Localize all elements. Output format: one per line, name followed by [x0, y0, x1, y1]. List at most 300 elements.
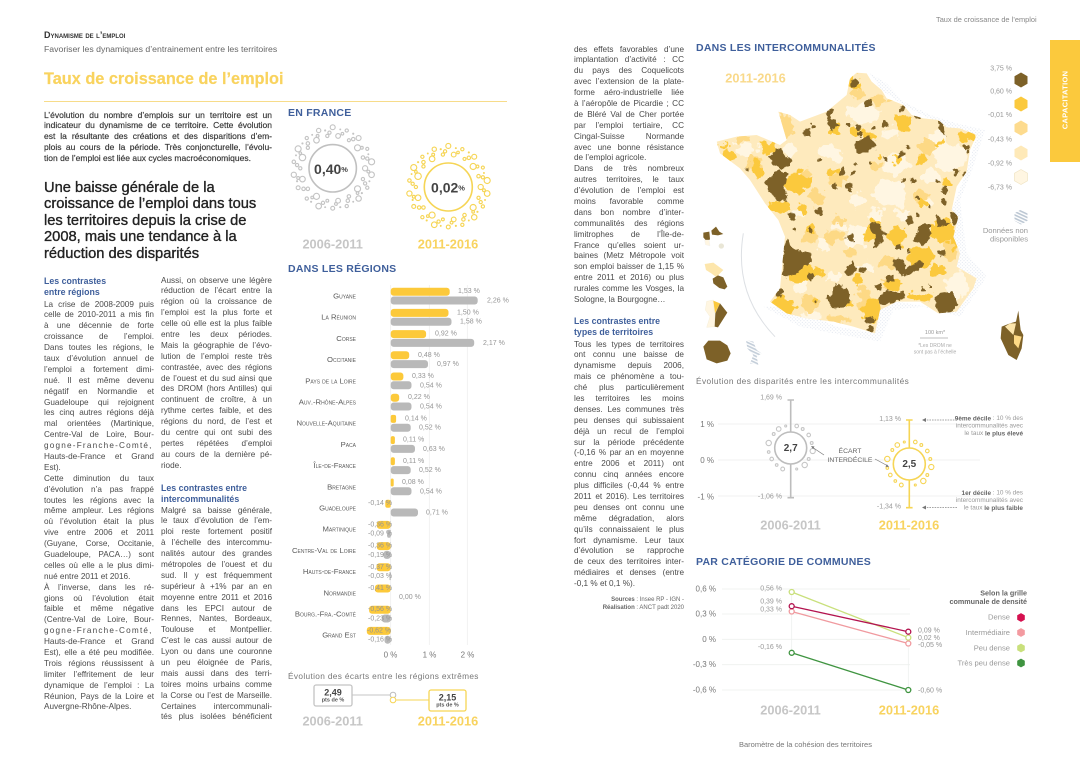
map scale: 100 km* — [925, 330, 946, 336]
text column 2 continued: dans les EPCI autour de — [161, 604, 272, 613]
text column 3: dans bon nombre d’inter- — [574, 208, 684, 217]
text column 2 — [161, 276, 272, 470]
line chart: communes: 2006-2011 — [760, 702, 821, 718]
text column 2 continued: toires moins urbains comme — [161, 680, 272, 689]
map scale — [914, 330, 956, 356]
region names: Pays de la Loire — [305, 376, 357, 385]
value labels: 1,58 % — [460, 318, 482, 326]
text column 3: avec une bonne résistance — [574, 143, 684, 152]
text column 2 continued: ploi reste fortement positif — [161, 527, 272, 536]
bars 2011-2016 — [367, 288, 450, 635]
Mayotte — [746, 340, 762, 365]
text column 1: (Centre-Val de Loire, Bour- — [44, 615, 154, 624]
value labels: -0,56 % — [368, 606, 392, 613]
axis labels: 0 % — [384, 650, 397, 660]
text column 2 continued: un peu éloignée de Paris, — [161, 658, 272, 667]
box 2,15: 2,15 — [439, 692, 456, 702]
text column 3: forme aéro-industrielle liée — [574, 88, 684, 97]
line chart: communes: 0,02 % — [918, 635, 940, 642]
text column 3: de Bléré Val de Cher portée — [574, 110, 684, 119]
value labels: 0,11 % — [403, 458, 424, 465]
inset arc — [741, 233, 775, 337]
text column 3 continued — [574, 340, 684, 588]
text column 2: du centre qui ont subi des — [161, 428, 272, 437]
text column 2: continuent de croître, à un — [161, 395, 272, 404]
text column 2 continued: sud. Il y est fréquemment — [161, 571, 272, 580]
chart: disparités: 2011-2016 — [879, 518, 939, 532]
map scale: *Les DROM ne — [918, 343, 952, 349]
value labels: 0,11 % — [403, 437, 424, 444]
section subtitle: Favoriser les dynamiques d’entrainement entre les territoires — [44, 44, 277, 54]
value labels: -0,09 % — [368, 530, 392, 538]
Guadeloupe — [703, 227, 724, 249]
value labels: -0,19 % — [368, 552, 392, 559]
value labels: 0,97 % — [437, 361, 459, 368]
text column 2: riode. — [161, 461, 181, 470]
palest territories — [737, 103, 968, 321]
text column 1: Cette diminution du taux — [44, 474, 154, 483]
map legend: -6,73 % — [988, 184, 1012, 192]
text column 3: autres territoires, le taux — [574, 175, 684, 184]
interdecile 2011-2016: -1,34 % — [877, 504, 901, 510]
text column 1: celles où elle a le plus dimi- — [44, 561, 154, 570]
intro text: plois au cours de la période. Très conjoncturelle, l’évolu- — [44, 142, 272, 152]
map scale: sont pas à l’échelle — [914, 350, 956, 356]
text column 2: rythme certes faible, et des — [161, 406, 272, 415]
region names: Corse — [336, 334, 357, 343]
text column 1: La crise de 2008-2009 puis — [44, 300, 154, 308]
line chart: communes: -0,16 % — [758, 644, 782, 651]
text column 2: contrastée, avec des régions — [161, 363, 272, 372]
text column 1: Réunion, Pays de la Loire et — [44, 692, 154, 701]
text column 3: implantation d’activité : CC — [574, 55, 684, 64]
gap chart: régions extrêmes: 2011-2016 — [418, 714, 478, 728]
region names: Hauts-de-France — [303, 567, 357, 576]
text column 1: Dans toutes les régions, le — [44, 343, 154, 352]
axis labels: 1 % — [423, 650, 436, 660]
map legend: -0,92 % — [988, 160, 1012, 168]
value labels: -0,41 % — [368, 585, 392, 592]
line chart: communes: -0,05 % — [918, 642, 942, 649]
text column 2 continued: la Corse ou l’est de Marseille. — [161, 691, 272, 700]
9e décile note: le taux le plus élevé — [964, 430, 1023, 437]
region names — [292, 292, 357, 640]
text column 1: Est), elle a été peu modifiée. — [44, 648, 154, 657]
text column 2 continued: tés plus isolées bénéficient — [161, 712, 272, 721]
line chart: communes: 0,3 % — [696, 610, 716, 618]
text column 3 continued: (-0,16 % par an en moyenne — [574, 448, 684, 457]
text column 1: où l’évolution était la plus — [44, 517, 154, 526]
text column 2 continued: supérieur à +1% par an en — [161, 582, 272, 591]
value labels: -0,03 % — [368, 573, 392, 580]
text column 1: Centre-Val de Loire, Bour- — [44, 430, 154, 439]
text column 1: d’évolution n’a pas frappé — [44, 485, 154, 494]
text column 3 continued: de ceux des territoires inter- — [574, 557, 684, 566]
value labels: -0,37 % — [368, 564, 392, 571]
line chart: communes: 0 % — [702, 635, 716, 644]
value labels: -0,62 % — [367, 627, 391, 634]
text column 1: croissance de l’emploi. — [44, 332, 154, 341]
map period label: 2011-2016 — [725, 70, 786, 86]
box 2,49 — [314, 685, 352, 706]
text column 2 continued: Certaines intercommunali- — [161, 702, 272, 711]
value labels: 1,53 % — [458, 288, 480, 295]
subheading: contrastes entre régions: entre régions — [44, 287, 100, 297]
main heading: croissance de l’emploi dans tous — [44, 196, 256, 212]
map: France — [703, 70, 1023, 365]
text column 1: Est). — [44, 463, 61, 472]
text column 2 continued: Malgré sa baisse générale, — [161, 506, 272, 514]
interdecile 2006-2011 — [758, 394, 815, 500]
value labels: 0,48 % — [418, 352, 440, 359]
text column 3 continued: ché plus particulièrement — [574, 383, 684, 392]
text column 1: Guadeloupe qui rejoignent — [44, 398, 154, 407]
text column 1: nué entre 2011 et 2016. — [44, 572, 130, 581]
text column 3 continued: peu denses qui subissaient — [574, 416, 684, 425]
text column 3 continued: Tous les types de territoires — [574, 340, 684, 348]
value labels: 0,52 % — [419, 467, 441, 474]
value labels: 0,71 % — [426, 510, 448, 516]
value labels: 2,17 % — [483, 340, 505, 347]
map legend: disponibles — [990, 234, 1028, 244]
text column 3 continued: fort dynamisme. Leur taux — [574, 536, 684, 545]
map legend: 3,75 % — [990, 66, 1012, 72]
value labels: 0,22 % — [408, 394, 430, 401]
text column 3 continued: déjà un recul de l’emploi — [574, 427, 684, 436]
text column 2 continued: nalités autour des grandes — [161, 549, 272, 558]
legend: communes: Peu dense — [974, 644, 1010, 652]
subheading: contrastes entre types de territoires: types de territoires — [574, 327, 653, 337]
text column 2 continued — [161, 506, 272, 721]
value labels: -0,36 % — [368, 543, 392, 550]
Corse — [1001, 311, 1023, 360]
écart interdécile callout — [811, 446, 889, 467]
value labels: 1,50 % — [457, 309, 479, 316]
text column 2: celle où elle est la plus faible — [161, 319, 272, 328]
text column 1: les cinq autres régions déjà — [44, 408, 154, 417]
metropolitan territories — [710, 70, 983, 337]
text column 2: au cours de la dernière pé- — [161, 450, 272, 459]
text column 3 continued: plus difficiles (-0,44 % entre — [574, 481, 684, 490]
interdecile 2011-2016 — [877, 416, 934, 510]
gap chart title: Évolution des écarts entre les régions extrêmes — [288, 671, 479, 681]
Martinique — [705, 263, 727, 289]
text column 3 — [574, 44, 684, 304]
text column 2: l’emploi est la plus forte et — [161, 308, 272, 317]
écart interdécile callout: INTERDÉCILE — [828, 455, 873, 464]
chart: disparités: -1 % — [698, 492, 714, 502]
value labels: -0,14 % — [368, 500, 392, 507]
text column 3 continued: denses. Les communes très — [574, 405, 684, 414]
region names: Auv.-Rhône-Alpes — [299, 398, 357, 406]
intro text: est la résultante des créations et des disparitions d’em- — [44, 131, 272, 141]
text column 3 continued: les territoires les moins — [574, 394, 684, 403]
text column 3: du pays des Coquelicots — [574, 66, 684, 75]
bar chart: régions — [292, 285, 509, 660]
text column 1: dynamique de l’emploi : La — [44, 681, 154, 690]
main heading: réduction des disparités — [44, 246, 199, 262]
text column 3 continued: 2011 et 2016). Les territoires — [574, 492, 684, 501]
text column 3: Sologne, la Bourgogne… — [574, 295, 666, 304]
heading: par catégorie de communes: PAR CATÉGORIE DE COMMUNES — [696, 556, 871, 568]
text column 1: Hauts-de-France et Grand — [44, 452, 154, 461]
text column 2 continued: à l’échelle des intercommu- — [161, 538, 272, 547]
line chart: communes: -0,3 % — [693, 660, 716, 669]
main heading: 2008, mais une tendance à la — [44, 229, 237, 245]
series: très peu dense — [789, 650, 911, 692]
chart: disparités: 1 % — [700, 420, 714, 429]
text column 1 — [44, 300, 154, 711]
text column 3 continued: entre 2006 et 2011) ont — [574, 459, 684, 468]
legend: communes: Selon la grille — [980, 588, 1027, 598]
box 2,15 — [429, 690, 466, 711]
legend: communes — [950, 588, 1027, 668]
text column 1: gogne-Franche-Comté, — [44, 626, 153, 635]
region names: Centre-Val de Loire — [292, 546, 357, 555]
chart: France circles — [291, 125, 490, 252]
region names: Guyane — [333, 292, 357, 300]
text column 2 continued: moyenne entre 2011 et 2016 — [161, 593, 272, 602]
chart: disparités: 2006-2011 — [760, 518, 821, 532]
value labels: -0,16 % — [368, 636, 392, 644]
value labels — [367, 288, 509, 644]
period label 2011-2016: 2011-2016 — [418, 236, 478, 252]
text column 3 continued: -0,1 % et 0,1 %). — [574, 579, 635, 588]
legend: communes: communale de densité — [950, 597, 1027, 606]
gold territories — [718, 77, 975, 322]
text column 1: nué. Il est même devenu — [44, 376, 154, 385]
value labels: 0,52 % — [419, 424, 441, 432]
text column 1: toutes les régions avec la — [44, 496, 154, 505]
map legend: Données non — [983, 226, 1028, 235]
region names: Île-de-France — [312, 461, 357, 470]
text column 3: des effets favorables d’une — [574, 44, 684, 54]
value labels: 0,54 % — [420, 488, 442, 496]
text column 3 continued: ont connu une baisse de — [574, 350, 684, 359]
subheading: contrastes entre intercommunalités: intercommunalités — [161, 494, 239, 504]
écart interdécile callout: ÉCART — [839, 446, 861, 455]
9e décile note: 9ème décile : 10 % des — [955, 415, 1023, 422]
text column 3 continued: même dégradation, alors — [574, 514, 684, 523]
subheading: contrastes entre intercommunalités: Les contrastes entre — [161, 483, 247, 493]
box 2,15: pts de % — [436, 702, 459, 708]
series: intermédiaire — [789, 609, 911, 646]
region names: Grand Est — [322, 631, 356, 640]
1er décile note: 1er décile : 10 % des — [962, 490, 1023, 496]
line chart: communes: 0,09 % — [918, 628, 940, 634]
side tab: capacitation: CAPACITATION — [1060, 71, 1070, 129]
heading: en France: EN FRANCE — [288, 107, 352, 119]
gap chart: régions extrêmes — [302, 685, 478, 728]
line chart: communes: -0,60 % — [918, 688, 942, 694]
text column 1: l’emploi a fortement dimi- — [44, 365, 154, 374]
intro text: tion de l’emploi est liée aux cycles macroéconomiques. — [44, 153, 251, 163]
text column 2 continued: mais aussi dans des terri- — [161, 669, 272, 678]
series: dense — [789, 604, 911, 634]
sources — [603, 596, 684, 611]
subheading: contrastes entre régions: Les contrastes — [44, 276, 106, 286]
region names: Nouvelle-Aquitaine — [296, 419, 357, 428]
text column 1: Auvergne-Rhône-Alpes. — [44, 702, 131, 711]
value labels: 2,26 % — [487, 298, 509, 304]
text column 3 continued: sur la période précédente — [574, 438, 684, 447]
map legend: 0,60 % — [990, 88, 1012, 96]
value labels: -0,36 % — [368, 521, 392, 528]
text column 3 continued: qu’ils connaissaient le plus — [574, 525, 684, 534]
circle 2011-2016: 0,02% — [431, 180, 465, 196]
line chart: communes: 0,33 % — [760, 606, 782, 614]
text column 2: pertes répétées d’emploi — [161, 439, 272, 448]
text column 2: Aussi, on observe une légère — [161, 276, 272, 284]
text column 2: régions du nord, de l’est et — [161, 417, 272, 426]
chart: disparités — [698, 394, 1024, 532]
text column 2 continued: C’est le cas aussi autour de — [161, 636, 272, 645]
region names: Guadeloupe — [319, 504, 357, 512]
text column 3: d’évolution de l’emploi est — [574, 186, 684, 195]
region names: La Réunion — [321, 313, 356, 322]
text column 3 continued: peu denses ont connu une — [574, 503, 684, 512]
axis labels: 2 % — [461, 650, 474, 660]
text column 1: Guadeloupe, PACA…) sont — [44, 550, 154, 559]
chart: disparités: 0 % — [700, 456, 714, 465]
1er décile note — [922, 490, 1024, 512]
section label: Dynamisme de l’emploi — [44, 30, 125, 40]
text column 2 continued: Lyon ou dans une couronne — [161, 647, 272, 656]
sources: Réalisation : ANCT padt 2020 — [603, 605, 684, 611]
circle 2006-2011: 0,40% — [314, 161, 348, 177]
text column 1: À l’inverse, dans les ré- — [44, 583, 154, 592]
interdecile 2011-2016: 1,13 % — [879, 416, 901, 423]
gap chart: régions extrêmes: 2006-2011 — [302, 714, 363, 728]
text column 1: à une décennie de forte — [44, 321, 154, 330]
text column 2 continued: Rennes, Nantes, Bordeaux, — [161, 614, 272, 623]
bars 2006-2011 — [382, 296, 478, 644]
text column 3: Dans de très nombreux — [574, 164, 684, 173]
text column 2: réduction de l’écart entre la — [161, 286, 272, 295]
value labels: 0,08 % — [402, 479, 424, 486]
top-class territories — [746, 79, 971, 332]
1er décile note: intercommunalités avec — [956, 497, 1024, 504]
text column 1: (Guyane, Corse, Occitanie, — [44, 539, 154, 548]
region names: Martinique — [322, 525, 357, 534]
subheading: contrastes entre régions — [44, 276, 106, 297]
text column 3: par l’emploi tertiaire, CC — [574, 121, 684, 130]
text column 3 continued: connu cinq années encore — [574, 470, 684, 479]
text column 3: son emploi baisser de 1,15 % — [574, 262, 684, 271]
region names: Bourg.-Fra.-Comté — [295, 610, 357, 618]
region names: Bretagne — [327, 482, 357, 491]
text column 3 continued: d’évolution se rapproche — [574, 546, 684, 555]
text column 1: gogne-Franche-Comté, — [44, 441, 153, 450]
text column 1: mal orientées (Martinique, — [44, 419, 154, 428]
period label: 2006-2011 — [302, 236, 363, 252]
map legend — [983, 66, 1028, 244]
region names: Paca — [341, 440, 357, 449]
title rule — [44, 101, 507, 102]
side tab: capacitation — [1050, 40, 1080, 162]
9e décile note: intercommunalités avec — [956, 422, 1024, 430]
text column 2 continued: Toulouse et Montpellier. — [161, 625, 272, 634]
region names: Occitanie — [327, 355, 357, 364]
text column 2: région où la croissance de — [161, 297, 272, 306]
text column 1: gions où l’évolution était — [44, 594, 154, 603]
text column 1: limiter l’effritement de leur — [44, 670, 154, 679]
text column 3: entre 2011 et 2016) ou plus — [574, 273, 684, 282]
line chart: communes: 0,6 % — [696, 584, 716, 594]
running header: Taux de croissance de l’emploi — [936, 15, 1037, 24]
title: Taux de croissance de l’emploi — [44, 70, 283, 88]
map legend: -0,43 % — [988, 136, 1012, 144]
legend: communes: Intermédiaire — [966, 628, 1010, 637]
main heading: Une baisse générale de la — [44, 180, 215, 196]
text column 3: France qu’elles soient ur- — [574, 241, 684, 250]
legend: communes: Très peu dense — [958, 658, 1010, 668]
value labels: 0,33 % — [412, 373, 434, 380]
text column 1: faible et même négative — [44, 604, 154, 613]
line chart: communes — [693, 584, 942, 718]
text column 2: Mais la géographie de l’évo- — [161, 341, 272, 350]
text column 2: de l’ouest et du sud ainsi que — [161, 374, 272, 383]
9e décile note — [922, 415, 1024, 437]
circle 2006-2011 — [291, 125, 375, 210]
text column 3: à l’aéropôle de Picardie ; CC — [574, 99, 684, 108]
intro text: indicateur du dynamisme de ce territoire. Cette évolution — [44, 120, 272, 130]
text column 2: des DROM (hors Antilles) qui — [161, 384, 272, 393]
interdecile 2006-2011: 2,7 — [784, 443, 798, 454]
text column 2: entre les deux périodes. — [161, 330, 272, 339]
text column 3: limitrophes de l’Île-de- — [574, 230, 684, 239]
line chart: communes: 0,56 % — [760, 586, 782, 592]
heading: dans les intercommunalités: DANS LES INTERCOMMUNALITÉS — [696, 42, 876, 54]
value labels: 0,54 % — [420, 404, 442, 410]
heading: dans les régions: DANS LES RÉGIONS — [288, 263, 396, 275]
1er décile note: le taux le plus faible — [964, 504, 1023, 512]
text column 1: Hauts-de-France et Grand — [44, 637, 154, 646]
Guyane — [705, 300, 727, 327]
series: peu dense — [789, 590, 911, 640]
text column 1: même ampleur. Les régions — [44, 506, 154, 515]
text column 1: négatif en Normandie et — [44, 387, 154, 396]
text column 3: moins favorable comme — [574, 197, 684, 206]
text column 1: celle de 2010-2011 a mis fin — [44, 310, 154, 319]
value labels: -0,23 % — [368, 616, 392, 622]
intro text: L’évolution du nombre d’emplois sur un territoire est un — [44, 110, 272, 120]
text column 1: vive entre 2006 et 2011 — [44, 528, 154, 537]
box 2,49: pts de % — [322, 698, 344, 704]
legend: communes: Dense — [988, 612, 1010, 622]
text column 3: Cingal-Suisse Normande — [574, 132, 684, 141]
subheading: contrastes entre intercommunalités — [161, 483, 247, 504]
interdecile 2006-2011: -1,06 % — [758, 494, 782, 500]
subheading: contrastes entre types de territoires — [574, 316, 660, 337]
text column 3 continued: dynamisme depuis 2006, — [574, 361, 684, 370]
text column 2: lution de l’emploi reste très — [161, 352, 272, 361]
text column 1: Trois régions réussissent à — [44, 659, 154, 668]
map legend: -0,01 % — [988, 112, 1012, 119]
line chart: communes: -0,6 % — [693, 686, 716, 694]
La Réunion — [703, 341, 731, 363]
box 2,49: 2,49 — [324, 688, 342, 698]
disparities title: Évolution des disparités entre les intercommunalités — [696, 376, 909, 386]
text column 3: rurales comme les Vosges, la — [574, 284, 684, 293]
value labels: 0,00 % — [399, 594, 421, 601]
region names: Normandie — [324, 588, 357, 597]
text column 3: de l’emploi agricole. — [574, 153, 646, 162]
sources: Sources : Insee RP - IGN - — [611, 597, 684, 603]
line chart: communes: 2011-2016 — [879, 702, 939, 718]
text column 3: baines (Metz Métropole voit — [574, 251, 684, 260]
text column 3 continued: médiaires et denses (entre — [574, 568, 684, 577]
